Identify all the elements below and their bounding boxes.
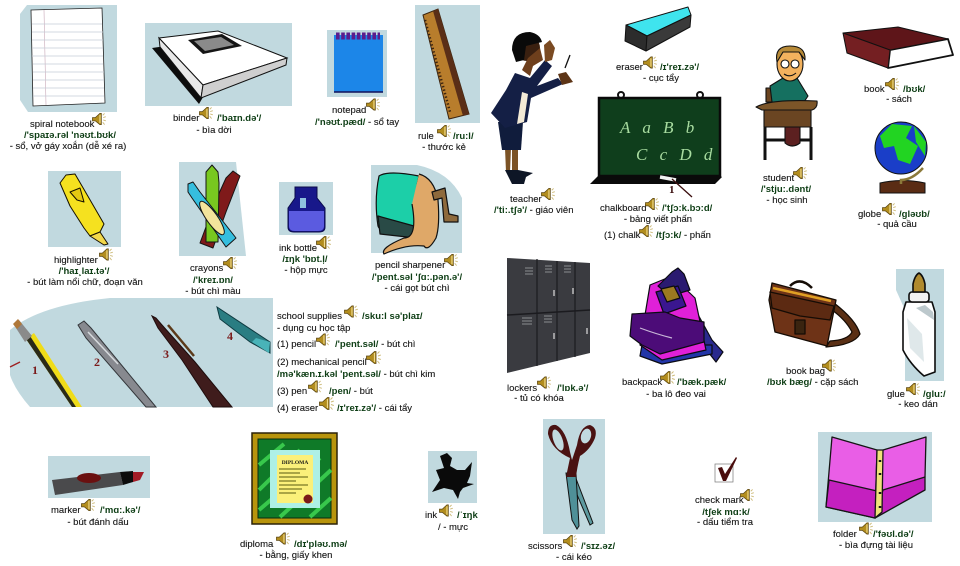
icon: marker <box>52 471 144 495</box>
item: ink bottle <box>279 182 333 276</box>
item: rule <box>415 5 480 153</box>
item: scissors <box>528 419 615 563</box>
icon: eraser <box>217 307 270 353</box>
label: book: book <box>864 84 885 95</box>
label: ink: / - mực <box>438 522 468 533</box>
label: marker: /'mɑ:.kə'/ <box>100 505 141 516</box>
icon: ink bottle <box>288 187 325 232</box>
label: eraser <box>616 57 700 84</box>
label: scissors: /'sɪz.əz/ <box>581 541 615 552</box>
label: pencil sharpener: - cái gọt bút chì <box>385 283 450 294</box>
label: school supplies list: /pen/ - bút <box>329 386 373 397</box>
label: lockers: - tủ có khóa <box>514 393 565 404</box>
label: folder: folder <box>833 529 857 540</box>
label: lockers: lockers <box>507 383 537 394</box>
label: binder: /'baɪn.də'/ <box>217 113 262 124</box>
label: notepad: notepad <box>332 105 366 116</box>
item: glue <box>887 269 946 410</box>
label: backpack: /'bæk.pæk/ <box>677 377 727 388</box>
label: diploma: /dɪ'pləʊ.mə/ <box>294 539 348 550</box>
label: spiral notebook: spiral notebook <box>30 119 95 130</box>
label: ink <box>425 505 478 533</box>
label: highlighter: highlighter <box>54 255 98 266</box>
label: chalkboard: (1) chalk <box>604 230 641 241</box>
label: globe <box>858 203 930 230</box>
icon: chalkboard: A a B b <box>619 118 698 137</box>
item: lockers <box>507 258 590 404</box>
label: glue: - keo dán <box>898 399 938 410</box>
label: school supplies list: /sku:l sə'plaɪ/ <box>362 311 423 322</box>
label: backpack <box>622 372 727 400</box>
label: backpack: backpack <box>622 377 662 388</box>
label: diploma: diploma <box>240 539 274 550</box>
label: chalkboard <box>600 198 713 241</box>
numbers and chalk mark <box>10 329 233 377</box>
numbers and chalk mark: 1 <box>32 363 38 377</box>
label: check mark <box>695 489 754 528</box>
label: check mark: - dấu tiểm tra <box>697 517 754 528</box>
label: spiral notebook <box>10 113 126 152</box>
panel: highlighter <box>48 171 121 247</box>
numbers and chalk mark: 3 <box>163 347 169 361</box>
label: school supplies list <box>277 306 435 414</box>
label: student: - học sinh <box>766 195 808 206</box>
panel: ink bottle <box>279 182 333 235</box>
icon: lockers <box>507 258 590 373</box>
label: rule: rule <box>418 131 434 142</box>
panel: crayons <box>179 162 246 256</box>
label: eraser: /ɪ'reɪ.zə'/ <box>660 62 700 73</box>
label: pencil sharpener <box>372 254 462 294</box>
panel: folder <box>818 432 932 522</box>
label: marker: marker <box>51 505 81 516</box>
label: chalkboard: /tʃɔ:k/ - phấn <box>656 230 711 241</box>
panel: glue <box>896 269 944 381</box>
label: ink bottle <box>279 236 331 276</box>
label: chalkboard: /'tʃɔ:k.bɔ:d/ <box>662 203 713 214</box>
label: diploma <box>240 533 348 561</box>
label: ink bottle: /ɪŋk 'bɒt.ļ/ <box>282 254 328 265</box>
icon: board eraser <box>625 7 691 51</box>
label: teacher: teacher <box>510 194 542 205</box>
item: pencil sharpener <box>371 165 462 294</box>
icon: diploma: DIPLOMA <box>282 460 308 466</box>
icon: glue <box>903 273 935 376</box>
label: student <box>761 167 811 206</box>
label: check mark: /tʃek mɑ:k/ <box>702 507 750 518</box>
label: backpack: - ba lô đeo vai <box>646 389 706 400</box>
item: student <box>756 46 817 206</box>
label: ink bottle: - hộp mực <box>284 265 328 276</box>
panel: spiral notebook <box>20 5 117 112</box>
item: folder <box>818 432 932 551</box>
label: ink bottle: ink bottle <box>279 243 317 254</box>
label: pencil sharpener: /'pent.səl 'ʃɑ:.pən.ə'/ <box>372 272 462 283</box>
label: teacher <box>494 188 574 216</box>
icon: folder <box>826 437 926 518</box>
label: glue: /glu:/ <box>923 389 946 400</box>
item: binder <box>145 23 292 136</box>
icon: student <box>756 46 817 160</box>
label: school supplies list: (2) mechanical pencil <box>277 357 367 368</box>
item: book <box>843 27 953 105</box>
callout: chalk number <box>669 179 692 197</box>
panel: marker <box>48 456 150 498</box>
icon: rule <box>423 9 469 119</box>
icon: crayons <box>188 165 240 248</box>
numbers and chalk mark: 4 <box>227 329 233 343</box>
label: scissors <box>528 535 615 563</box>
label: ink: /ˈɪŋk <box>457 510 478 521</box>
item: chalkboard <box>590 92 722 241</box>
label: student: student <box>763 173 795 184</box>
label: pencil sharpener: pencil sharpener <box>375 260 445 271</box>
icon: book bag <box>769 281 860 347</box>
label: globe: /gləʊb/ <box>899 209 930 220</box>
label: scissors: scissors <box>528 541 563 552</box>
label: school supplies list: (3) pen <box>277 386 307 397</box>
item: check mark <box>695 457 754 528</box>
icon: book <box>843 27 953 68</box>
item: globe <box>858 122 930 230</box>
label: folder <box>833 523 914 551</box>
icon: check mark <box>715 457 737 482</box>
icon: spiral notebook <box>31 8 105 106</box>
label: check mark: check mark <box>695 495 744 506</box>
icon: pencil sharpener <box>376 173 458 254</box>
callout: chalk number: 1 <box>669 184 674 196</box>
label: marker: - bút đánh dấu <box>67 517 129 528</box>
item: notepad <box>315 30 399 128</box>
icon: teacher <box>491 32 573 184</box>
label: teacher: /'ti:.tʃə'/ - giáo viên <box>494 205 574 216</box>
label: globe: globe <box>858 209 881 220</box>
label: lockers: /'lɒk.ə'/ <box>557 383 589 394</box>
item: backpack <box>622 268 727 400</box>
label: book: /bʊk/ <box>903 84 926 95</box>
icon: binder <box>152 31 287 104</box>
label: binder: binder <box>173 113 199 124</box>
panel: rule <box>415 5 480 123</box>
item: diploma <box>240 433 348 561</box>
panel: binder <box>145 23 292 106</box>
icon: pencil <box>13 319 82 407</box>
label: eraser: eraser <box>616 62 643 73</box>
label: globe: - quả cầu <box>877 219 917 230</box>
label: spiral notebook: - sổ, vở gáy xoắn (dễ xé ra) <box>10 141 126 152</box>
panel: scissors <box>543 419 605 534</box>
label: crayons <box>185 257 241 297</box>
icon: chalkboard <box>590 92 722 184</box>
panel: ink <box>428 451 477 503</box>
label: school supplies list: /mə'kæn.ɪ.kəl 'pent.səl/ - bút chì kim <box>277 369 435 380</box>
label: book <box>864 78 926 105</box>
icon: mechanical pencil <box>78 321 156 407</box>
label: folder: /'fəʊl.də'/ <box>873 529 914 540</box>
label: book bag: book bag <box>786 366 825 377</box>
label: rule <box>418 125 474 153</box>
item: eraser <box>616 7 700 84</box>
item: crayons <box>179 162 246 297</box>
item: marker <box>48 456 150 528</box>
label: folder: - bìa đựng tài liệu <box>839 540 913 551</box>
item: book bag <box>767 281 860 388</box>
item: ink <box>425 451 478 533</box>
label: rule: /ru:l/ <box>453 131 474 142</box>
label: school supplies list: (1) pencil <box>277 339 316 350</box>
label: binder <box>173 107 262 136</box>
icon: scissors <box>548 425 596 529</box>
label: school supplies list: school supplies <box>277 311 342 322</box>
item: school supplies <box>10 298 435 414</box>
label: notepad <box>315 99 399 128</box>
label: spiral notebook: /'spaɪə.rəl 'nəʊt.bʊk/ <box>24 130 116 141</box>
label: chalkboard: - bảng viết phấn <box>624 214 692 225</box>
label: school supplies list: /'pent.səl/ - bút chì <box>335 339 416 350</box>
panel: pencil sharpener <box>371 165 462 253</box>
label: chalkboard: chalkboard <box>600 203 646 214</box>
icon: highlighter <box>60 174 108 245</box>
label: student: /'stju:.dənt/ <box>761 184 811 195</box>
label: highlighter: /'haɪ¸laɪ.tə'/ <box>59 266 110 277</box>
label: rule: - thước kẻ <box>422 142 466 153</box>
label: scissors: - cái kéo <box>556 552 592 563</box>
label: highlighter: - bút làm nổi chữ, đoạn văn <box>27 277 143 288</box>
item: teacher <box>491 32 574 216</box>
label: eraser: - cục tẩy <box>643 73 679 84</box>
label: book: - sách <box>886 94 912 105</box>
item: highlighter <box>27 171 143 288</box>
label: school supplies list: - dụng cụ học tập <box>277 323 350 334</box>
icon: pen <box>152 316 232 407</box>
label: glue: glue <box>887 389 905 400</box>
panel: notepad <box>327 30 387 97</box>
icon: chalkboard: C c D d <box>636 145 716 164</box>
label: ink: ink <box>425 510 437 521</box>
label: binder: - bìa dời <box>196 125 232 136</box>
numbers and chalk mark: 2 <box>94 355 100 369</box>
label: notepad: /'nəʊt.pæd/ - sổ tay <box>315 117 399 128</box>
label: school supplies list: /ɪ'reɪ.zə'/ - cái tẩy <box>337 403 412 414</box>
label: crayons: /'kreɪ.ɒn/ <box>193 275 233 286</box>
icon: ink splat <box>432 453 474 499</box>
label: crayons: - bút chì màu <box>185 286 241 297</box>
panel: school supplies illustration <box>10 298 273 407</box>
item: spiral notebook <box>10 5 126 152</box>
icon: backpack <box>630 268 723 364</box>
icon: globe <box>875 122 927 193</box>
icon: notepad <box>334 35 383 92</box>
label: lockers <box>507 377 589 404</box>
label: highlighter <box>27 249 143 288</box>
label: diploma: - bằng, giấy khen <box>260 550 332 561</box>
label: book bag: /bʊk bæg/ - cặp sách <box>767 377 858 388</box>
label: glue <box>887 383 946 410</box>
label: marker <box>51 499 141 528</box>
label: book bag <box>767 360 858 388</box>
label: school supplies list: (4) eraser <box>277 403 318 414</box>
label: crayons: crayons <box>190 263 224 274</box>
